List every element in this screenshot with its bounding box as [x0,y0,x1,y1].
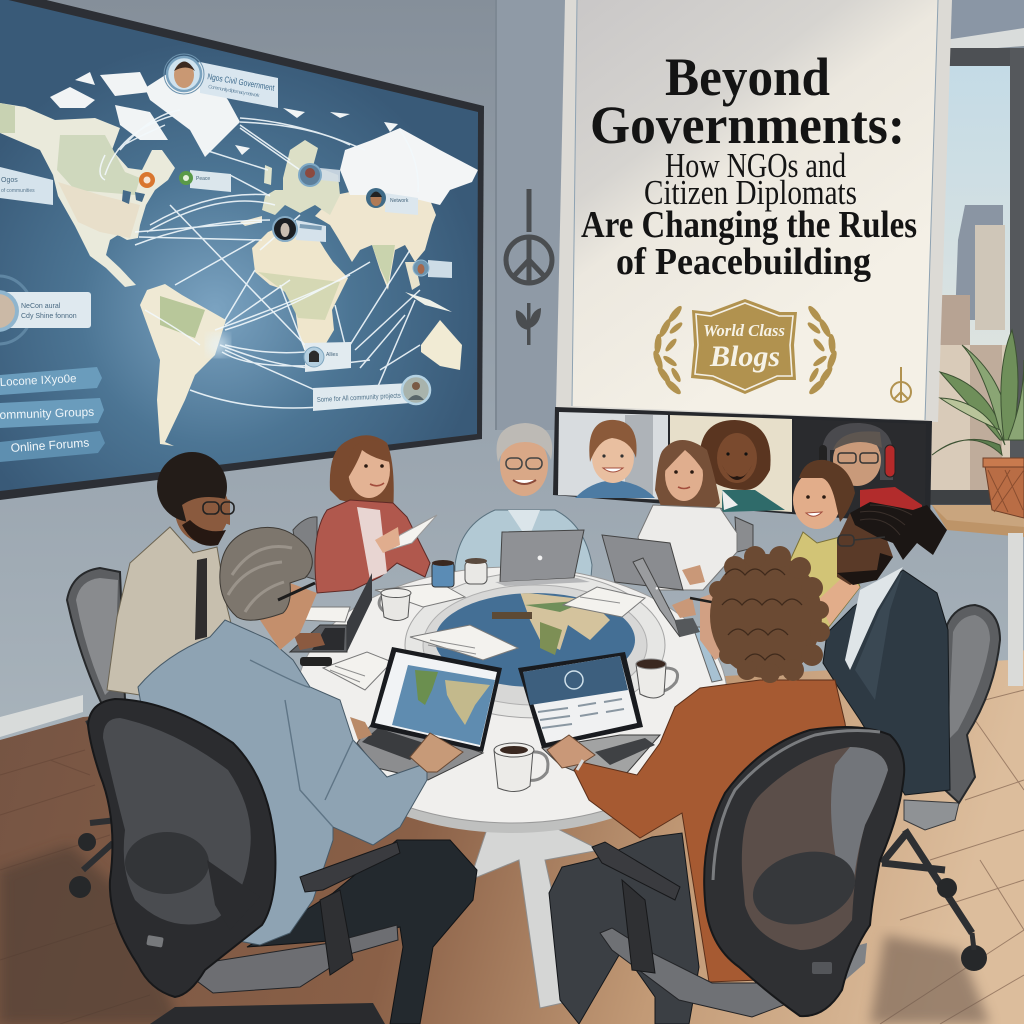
chair: front right [592,727,904,1017]
label: online forums [0,431,105,462]
laptop: apple right [602,535,705,637]
video participant 1 [575,415,655,498]
callout: green marker: Peace [196,176,210,182]
floor [0,650,1024,1024]
laptop: dashboard [518,652,660,782]
callout: asia [366,188,418,215]
pillar [495,0,565,430]
shelf [932,505,1024,686]
laptop: apple centre: ● [537,552,543,564]
callout: south east asia [413,260,452,278]
chair: front left [88,699,400,1024]
north america [0,103,175,287]
laptop: world map [357,647,502,780]
callout: asia: Network [390,198,409,204]
title: Are Changing the Rules [581,204,917,246]
eurasia [240,128,478,312]
globe inset [405,572,665,718]
phone [300,657,332,666]
connection lines [100,110,420,408]
callout: north africa [273,217,326,242]
label: community groups [0,398,104,428]
logo: World Class Blogs: World Class [703,321,785,340]
tablet edge [693,627,722,682]
icon: peace sign on wall [506,189,552,283]
person: man with tie [107,452,240,695]
callout: left circle [0,276,91,344]
person: woman in white shirt [638,440,753,590]
africa [252,225,348,355]
laurel left [651,304,684,396]
wall [0,0,1024,760]
title: of Peacebuilding [616,241,871,283]
person: front left man in blue shirt [138,527,477,1024]
chair: back right [882,605,1000,971]
callout: left circle: Cdy Shine fonnon [21,313,77,320]
panel: round table [290,530,727,1008]
label: online forums: Online Forums [10,436,90,455]
title: Citizen Diplomats [644,173,857,212]
cup: front [494,743,548,792]
callout: NGOs civil government [164,54,278,108]
icon: orange marker [139,172,155,188]
callout: southern africa: Allies [326,352,338,358]
callout: NGOs civil government: Ngos Civil Government [207,71,276,93]
south america [140,284,226,446]
australia [421,320,462,370]
callout: europe [299,164,340,186]
title: Governments: [590,95,905,155]
cup: right [636,659,678,698]
callout: lower right: Some for All community projects [317,393,401,404]
window [920,0,1024,505]
logo: World Class Blogs: Blogs [709,340,780,373]
chair: back left [67,568,125,898]
cup: blue mug [432,560,454,587]
callout: top left [0,167,53,205]
title: Beyond [665,47,830,107]
glow [207,334,229,356]
person: woman in red blazer [293,435,437,593]
laptop: left side [290,573,372,652]
callout: green marker [179,170,231,192]
video wall screen [553,407,932,525]
person: man in dark suit [823,502,950,795]
laurel right [806,304,839,396]
person: front right in brown jacket [547,546,850,1024]
icon: small peace sign [891,367,911,402]
logo: World Class Blogs [691,299,797,394]
person: woman in yellow [787,460,860,632]
laptop: apple centre [495,530,590,586]
video participant 2 [699,420,785,512]
video participant 3 [819,423,922,515]
cup: white back [465,558,487,584]
documents [300,583,645,690]
laptop: apple right: ● [655,586,659,592]
label: local exchange: Locone IXyo0e [0,373,77,389]
callout: lower right [313,376,430,411]
panel: poster [556,0,952,422]
greenland and arctic islands [50,62,398,157]
baseboard [0,695,83,737]
callout: NGOs civil government: Community diplomacy network [208,84,260,99]
cup: left [379,588,411,620]
icon: sprout on wall [516,303,541,345]
person: grey haired man [455,423,592,590]
callout: top left: Ogos [1,177,18,184]
label: local exchange [0,367,102,395]
panel: map screen [0,0,484,500]
plant [932,330,1024,518]
callout: top left: of communities [1,188,35,194]
callout: left circle: NeCon aural [21,303,61,310]
callout: southern africa [304,342,351,372]
title: How NGOs and [665,146,846,185]
title [581,47,917,283]
